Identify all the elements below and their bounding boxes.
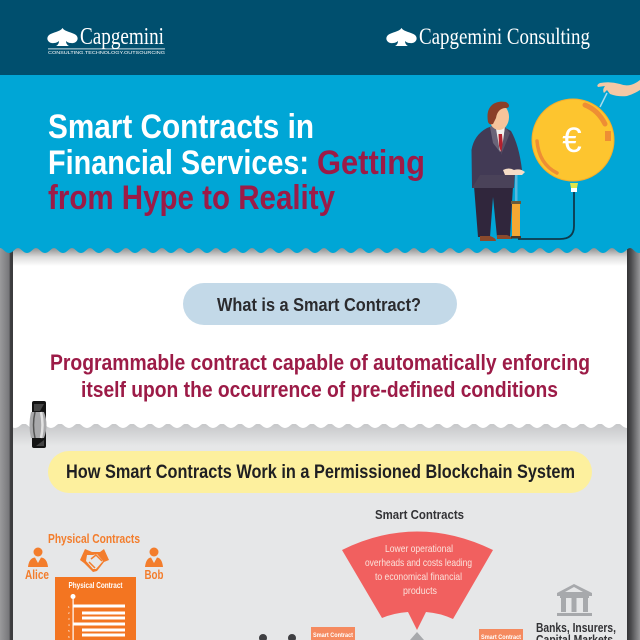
shoes [480, 236, 496, 241]
head [489, 104, 509, 130]
illustration: man inflating euro balloon [472, 99, 614, 241]
Capgemini logo left [47, 24, 166, 55]
Capgemini logo left: CONSULTING.TECHNOLOGY.OUTSOURCING [48, 50, 166, 55]
title: Getting [317, 144, 425, 182]
smart contract tag right [479, 629, 523, 640]
title: Financial Services: [48, 144, 309, 182]
smart contract tag left: Smart Contract [313, 632, 354, 639]
hands [503, 168, 525, 175]
icon: Alice: Alice [25, 567, 49, 582]
panel: title banner [0, 75, 640, 248]
fan segment: lower costs: products [403, 585, 437, 597]
heading pill: what is a smart contract: What is a Smart Contract? [217, 295, 421, 315]
Capgemini logo left: Capgemini [80, 24, 164, 50]
panel: physical contracts [25, 531, 164, 640]
title [48, 108, 425, 217]
panel: smart contracts [259, 507, 523, 640]
balloon [532, 99, 614, 192]
fan segment: lower costs: to economical financial [375, 571, 462, 583]
trousers [474, 186, 513, 237]
scalloped edge of banner [0, 247, 640, 254]
heading pill: what is a smart contract [183, 283, 457, 325]
smart contract tag left [311, 627, 355, 640]
physical contract document: Physical Contract [68, 581, 123, 590]
title: Smart Contracts in [48, 108, 314, 146]
physical contract document: 2 [68, 611, 70, 615]
fan segment: lower costs: overheads and costs leading [365, 557, 472, 569]
network people heads [259, 634, 296, 640]
hose [518, 190, 574, 239]
label: physical contracts: Physical Contracts [48, 531, 140, 546]
panel: definition [13, 248, 627, 446]
icon: handshake [80, 549, 109, 572]
label: banks: Banks, Insurers, [536, 620, 616, 635]
physical contract document: 1 [68, 605, 70, 609]
heading pill: how smart contracts work [48, 451, 592, 493]
physical contract document: 3 [68, 617, 70, 621]
label: smart contracts: Smart Contracts [375, 507, 464, 522]
Capgemini Consulting logo right [386, 24, 590, 50]
Capgemini Consulting logo right: Capgemini Consulting [419, 24, 590, 50]
node diamond [410, 632, 424, 640]
icon: bank [557, 584, 592, 616]
physical contract document [55, 577, 136, 640]
jacket [472, 124, 522, 188]
title: from Hype to Reality [48, 179, 335, 217]
physical contract document: 5 [68, 629, 70, 633]
physical contract document: 4 [68, 623, 70, 627]
man [472, 102, 525, 241]
left binder edge [0, 240, 13, 640]
physical contract document: 6 [68, 635, 70, 639]
balloon: € [562, 121, 582, 160]
fan segment: lower costs [342, 532, 493, 630]
label: banks [536, 620, 616, 640]
icon: binder clip [30, 401, 46, 448]
icon: Bob: Bob [144, 567, 164, 582]
header band [0, 0, 640, 75]
panel: banks, insurers, capital markets [536, 584, 616, 640]
right binder edge [627, 240, 640, 640]
definition text [50, 350, 590, 402]
definition text: itself upon the occurrence of pre-defined conditions [81, 377, 558, 402]
fan segment: lower costs: Lower operational [385, 543, 453, 555]
pump [511, 175, 521, 238]
icon: hand holding pin [597, 80, 640, 107]
